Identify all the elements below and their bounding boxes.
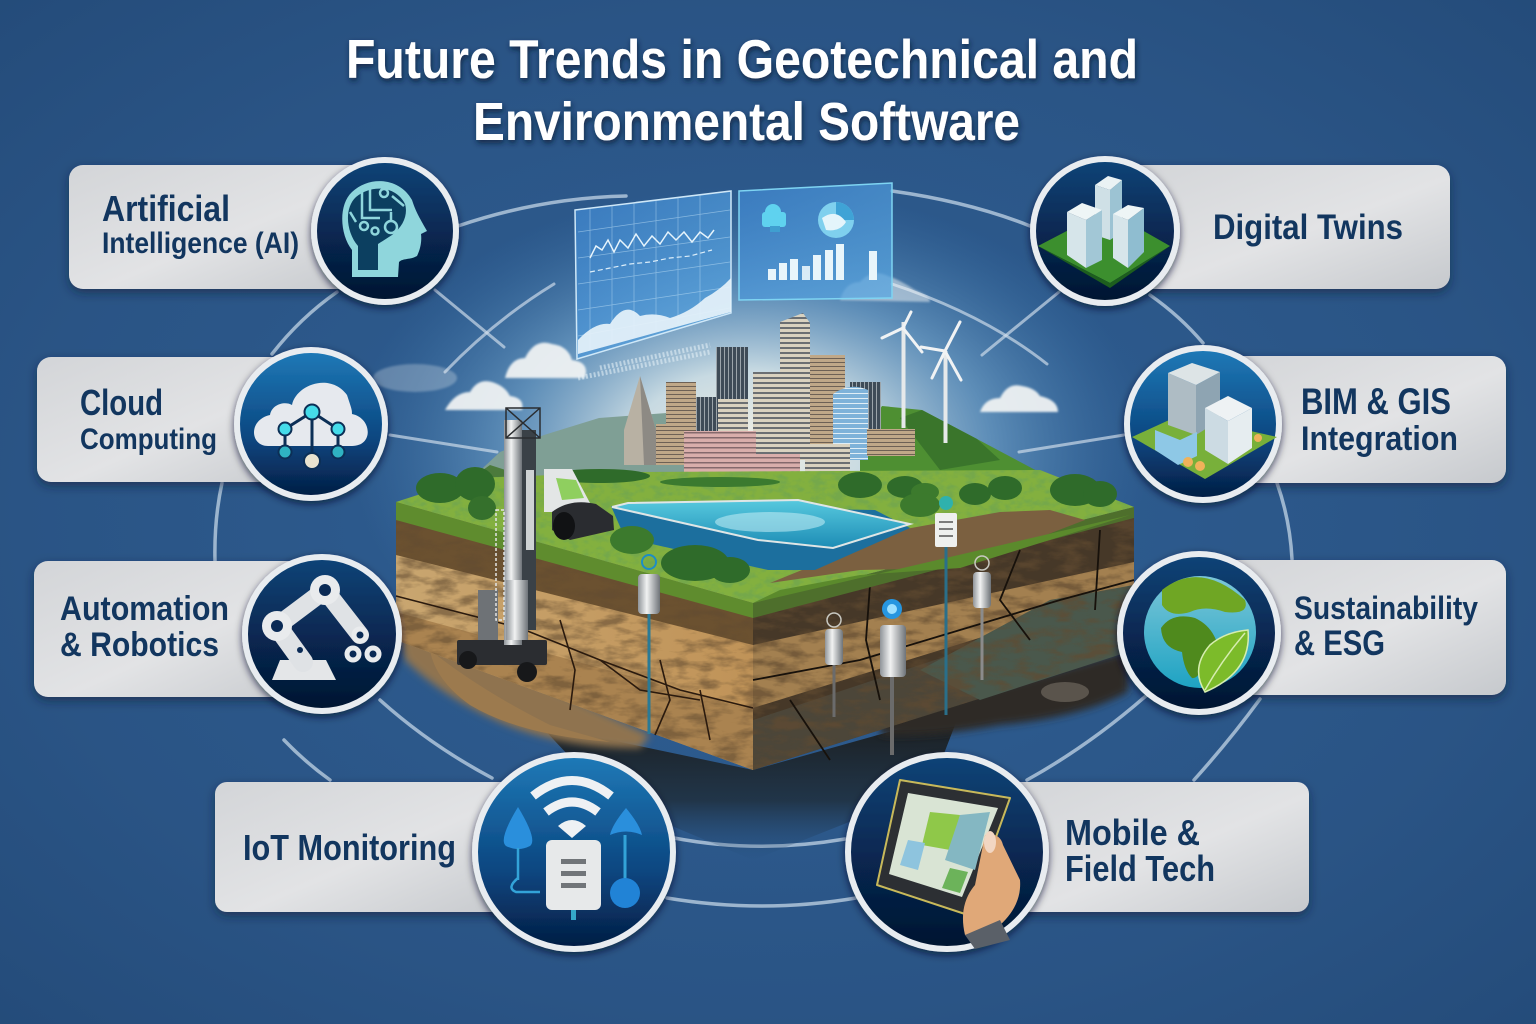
sensor 4 xyxy=(935,496,957,715)
city skyline xyxy=(624,313,915,486)
panel: Cloud Computing xyxy=(37,350,385,498)
card xyxy=(1120,165,1450,289)
panel: Mobile and Field Tech xyxy=(848,755,1309,949)
icon: globe and leaf xyxy=(1120,554,1278,712)
label: Integration xyxy=(1301,420,1458,458)
monitoring sensors xyxy=(638,496,991,755)
holographic dashboards xyxy=(575,183,892,378)
panel: Digital Twins xyxy=(1033,159,1450,303)
icon: pie chart xyxy=(818,202,854,238)
wind turbines xyxy=(882,312,961,443)
icon: IoT sensor hub xyxy=(475,755,673,949)
label: IoT Monitoring xyxy=(243,827,456,868)
grass surface xyxy=(396,470,1134,618)
label: Sustainability xyxy=(1294,590,1478,626)
label: Computing xyxy=(80,423,217,456)
icon: BIM buildings xyxy=(1127,348,1279,500)
inner connector lines xyxy=(390,284,1124,452)
card xyxy=(1210,560,1506,695)
label: Artificial xyxy=(102,188,230,229)
panel: Sustainability and ESG xyxy=(1120,554,1506,712)
ground below the block: rubble and reflection xyxy=(396,620,1130,860)
sky glow behind the site xyxy=(350,185,1150,715)
card xyxy=(69,165,369,289)
card xyxy=(215,782,515,912)
soil cross-section: right face xyxy=(753,507,1134,770)
card xyxy=(1000,782,1309,912)
title: Environmental Software xyxy=(473,92,1020,152)
label: Cloud xyxy=(80,382,163,423)
label: Intelligence (AI) xyxy=(102,227,299,260)
panel: IoT Monitoring xyxy=(215,755,673,949)
icon: robot arm xyxy=(245,557,399,711)
title xyxy=(346,28,1138,152)
label: & ESG xyxy=(1294,624,1385,663)
label: & Robotics xyxy=(60,626,219,664)
label xyxy=(60,590,229,664)
sensor 3 xyxy=(880,599,906,755)
panel: bar chart and icons xyxy=(739,183,892,300)
sensor 5 xyxy=(973,556,991,680)
truck xyxy=(544,469,614,540)
label: Field Tech xyxy=(1065,848,1215,889)
label xyxy=(1301,381,1458,458)
card xyxy=(37,357,327,482)
soil cross-section: left face xyxy=(396,502,753,770)
label xyxy=(1294,590,1478,663)
clouds xyxy=(373,273,1058,412)
drilling rig xyxy=(457,408,547,682)
hills xyxy=(455,406,1060,490)
icon: tablet in hand xyxy=(848,755,1046,949)
label xyxy=(102,188,299,260)
icon: cloud network xyxy=(237,350,385,498)
trees and shrubs xyxy=(416,467,1117,583)
label: Automation xyxy=(60,590,229,628)
card xyxy=(1210,356,1506,483)
sensor 2 xyxy=(825,613,843,717)
icon: hologram map xyxy=(762,204,786,232)
panel: Artificial Intelligence xyxy=(69,160,456,302)
sensor 1 xyxy=(638,555,660,734)
panel: BIM and GIS Integration xyxy=(1127,348,1506,500)
icon: digital twin city xyxy=(1033,159,1177,303)
icon: AI head xyxy=(314,160,456,302)
bars xyxy=(768,244,877,280)
panel: Automation and Robotics xyxy=(34,557,399,711)
label: Mobile & xyxy=(1065,812,1200,853)
label xyxy=(80,382,217,456)
floating data text xyxy=(578,345,710,378)
title: Future Trends in Geotechnical and xyxy=(346,28,1138,90)
label xyxy=(1065,812,1215,889)
panel: line and area chart xyxy=(575,191,731,359)
card xyxy=(34,561,334,697)
label: BIM & GIS xyxy=(1301,381,1451,422)
reservoir xyxy=(611,500,910,570)
connector network xyxy=(215,191,1292,906)
label: Digital Twins xyxy=(1213,208,1403,247)
